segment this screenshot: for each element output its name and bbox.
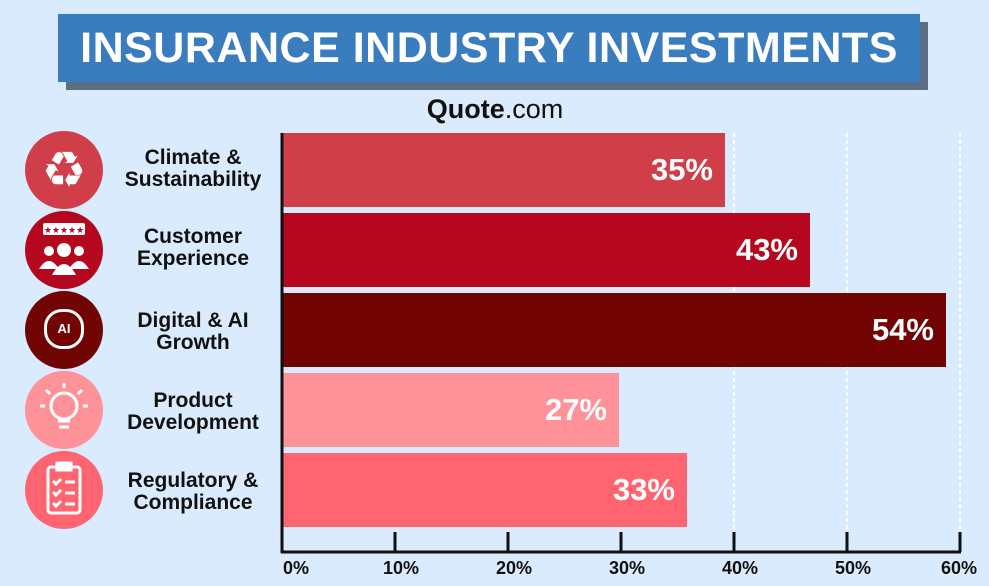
icon: recycle: ♻ [42, 142, 86, 198]
icon: clipboard [25, 451, 103, 529]
label: customer [137, 225, 249, 270]
label: climate: Sustainability [125, 168, 261, 191]
title [58, 14, 928, 90]
label: digital [137, 309, 249, 354]
label: regulatory: Regulatory & [128, 469, 258, 492]
label: digital: Growth [156, 331, 230, 354]
bar: climate: 35% [651, 152, 713, 187]
bar: digital: 54% [872, 312, 934, 347]
text: 40% [722, 558, 758, 578]
text: 0% [283, 558, 309, 578]
icon: customers: ★★★★★ [44, 225, 84, 235]
brand: Quote.com [427, 94, 563, 124]
text: 60% [941, 558, 977, 578]
text: 20% [496, 558, 532, 578]
bar: customer [283, 213, 810, 287]
bar: customer: 43% [736, 232, 798, 267]
bar: regulatory: 33% [613, 472, 675, 507]
bar: digital [283, 293, 946, 367]
text: 50% [835, 558, 871, 578]
label: product: Product [153, 389, 233, 412]
label: climate: Climate & [145, 146, 241, 169]
label: digital: Digital & AI [137, 309, 249, 332]
icon: recycle [25, 131, 103, 209]
text: 10% [383, 558, 419, 578]
label: customer: Experience [137, 247, 249, 270]
label: product [127, 389, 259, 434]
label: product: Development [127, 411, 259, 434]
icon: customers [25, 211, 103, 289]
icon: AI brain [25, 291, 103, 369]
title: INSURANCE INDUSTRY INVESTMENTS [80, 24, 898, 72]
icon: lightbulb [25, 371, 103, 449]
x-axis labels [283, 558, 977, 578]
text: 30% [609, 558, 645, 578]
bar: climate [283, 133, 725, 207]
label: regulatory [128, 469, 258, 514]
bar: product [283, 373, 619, 447]
label: regulatory: Compliance [133, 491, 253, 514]
label: customer: Customer [144, 225, 242, 248]
bar: product: 27% [545, 392, 607, 427]
icon: AI brain: AI [58, 321, 70, 336]
bar: regulatory [283, 453, 687, 527]
label: climate [125, 146, 262, 191]
